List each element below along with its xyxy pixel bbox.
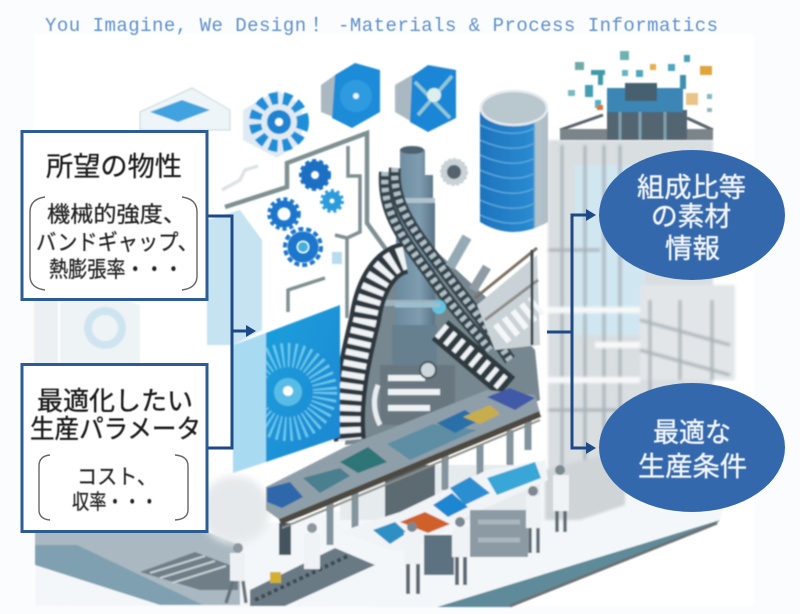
parameter list [72, 466, 158, 514]
hexagon 2: blue disc [321, 63, 380, 128]
ellipse: material information: の素材 [651, 202, 731, 232]
screen with radial pattern [233, 305, 340, 473]
cloud of steam [200, 476, 270, 544]
parameter list: 収率・・・ [72, 491, 158, 514]
grey gear behind tower [441, 159, 467, 185]
parameter list: コスト、 [77, 466, 157, 489]
heading: parameters to optimize [30, 386, 201, 444]
blue gears [269, 161, 342, 265]
molecules above tower [568, 51, 712, 112]
property list: 熱膨張率・・・ [49, 257, 183, 282]
pale panels left [34, 88, 262, 364]
title: You Imagine, We Design！ -Materials & Process Informatics [45, 15, 718, 37]
ellipse: optimal conditions [599, 383, 785, 512]
brackets [39, 455, 188, 520]
ellipse: material information [599, 150, 785, 280]
pale process tower right [545, 140, 735, 520]
hexagon 3: blue fan [395, 65, 456, 132]
lower conveyor [250, 548, 375, 606]
property list: バンドギャップ、 [36, 230, 198, 255]
panel: production parameters [22, 364, 207, 532]
illustration: smart factory scene [34, 51, 735, 607]
lower tables with samples [340, 460, 548, 575]
heading: parameters to optimize: 最適化したい [37, 386, 193, 416]
under-conveyor machinery [279, 420, 540, 555]
ellipse: material information: 情報 [665, 234, 720, 264]
ellipse: optimal conditions: 生産条件 [638, 452, 747, 482]
heading: parameters to optimize: 生産パラメータ [30, 414, 201, 444]
workers [226, 465, 569, 603]
pipes [222, 133, 395, 318]
panel: desired properties [22, 132, 207, 300]
brackets [30, 197, 197, 290]
property list [36, 202, 198, 282]
property list: 機械的強度、 [47, 202, 186, 227]
connector left with arrow [207, 216, 256, 448]
ellipse: optimal conditions: 最適な [653, 418, 731, 448]
central tower [345, 146, 540, 445]
tower roof with dark frame [560, 83, 713, 140]
heading: desired properties: 所望の物性 [46, 152, 182, 182]
hexagon 1: blue gear [243, 90, 303, 158]
spiral staircases [349, 168, 540, 440]
machinery [374, 362, 455, 425]
ellipse: material information: 組成比等 [637, 173, 746, 203]
upper conveyor [266, 388, 540, 528]
blue cylinder [480, 91, 548, 232]
connector right with arrows [547, 209, 596, 454]
factory floor [35, 470, 735, 607]
